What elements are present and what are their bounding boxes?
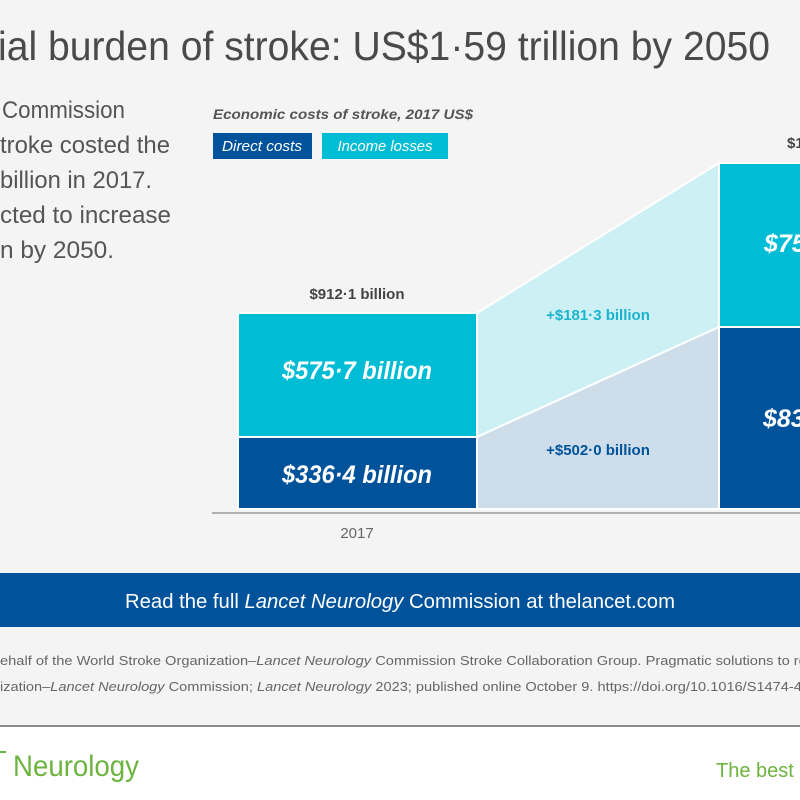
bar 2017: $912·1 billion	[309, 286, 405, 303]
intro text block	[0, 97, 171, 264]
legend	[213, 133, 448, 159]
bar 2017	[238, 286, 477, 509]
title: ial burden of stroke: US$1·59 trillion by 2050	[0, 23, 770, 69]
bar 2017: $575·7 billion	[281, 357, 432, 385]
increase labels: +$181·3 billion	[546, 307, 650, 324]
intro text block: n by 2050.	[0, 237, 114, 264]
bar 2017: $336·4 billion	[281, 461, 432, 489]
bar 2050	[719, 135, 800, 509]
chart subtitle: Economic costs of stroke, 2017 US$	[213, 106, 473, 122]
legend: Direct costs	[222, 138, 302, 155]
banner: Read the full Lancet Neurology Commission at thelancet.com	[125, 591, 675, 613]
citation: ization– Lancet Neurology Commission; Lancet Neurology 2023; published online October 9. https://doi.org/10.1016/S1474-44	[0, 679, 800, 694]
intro text block: troke costed the	[0, 132, 170, 159]
chart: 2017	[340, 525, 374, 542]
chart	[212, 135, 800, 542]
intro text block: cted to increase	[0, 202, 171, 229]
citation: ehalf of the World Stroke Organization– Lancet Neurology Commission Stroke Collaboration Group. Pragmatic solutions to red	[0, 653, 800, 668]
chart: +$502·0 billion	[546, 442, 650, 459]
citation	[0, 653, 800, 694]
connector: income losses increase	[477, 163, 719, 437]
connector: direct costs increase	[477, 327, 719, 509]
banner	[0, 573, 800, 627]
logo: Neurology: Neurology	[13, 750, 139, 783]
intro text block: billion in 2017.	[0, 167, 152, 194]
intro text block: Commission	[2, 97, 125, 124]
legend: Income losses	[338, 138, 433, 155]
